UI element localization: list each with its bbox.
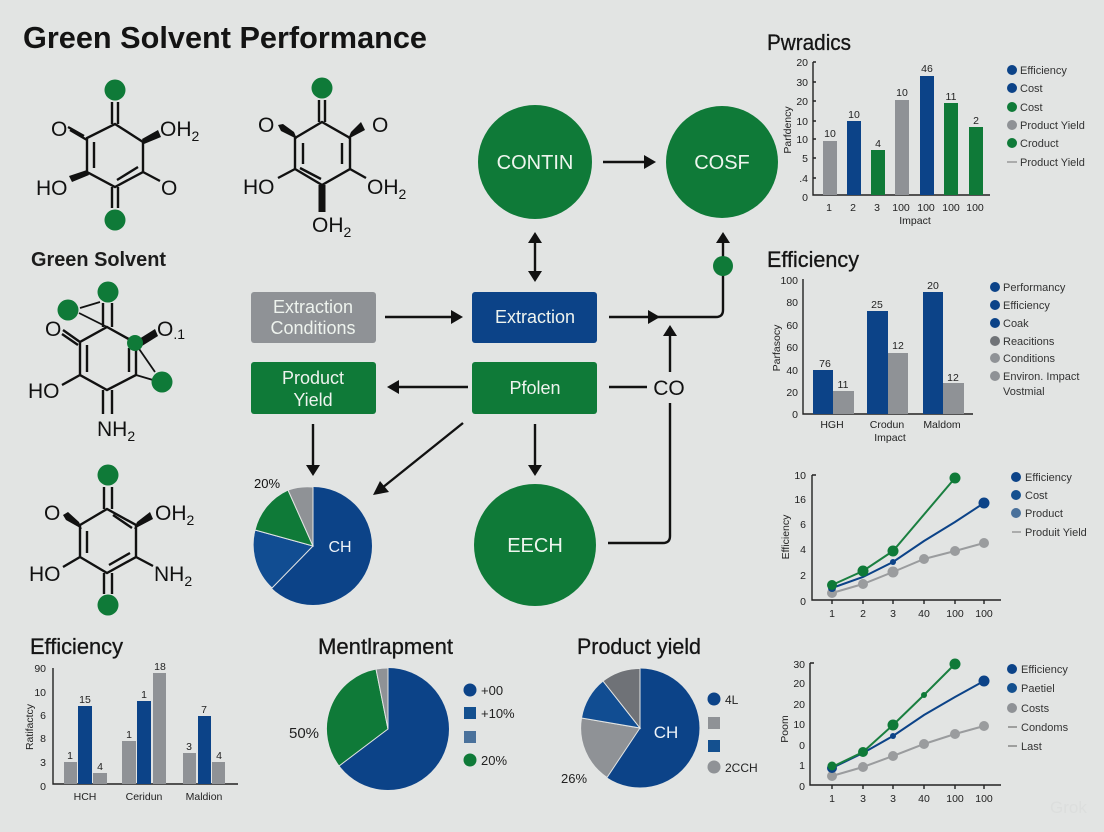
arrow: conditions to extraction	[385, 310, 463, 324]
bar chart: pwradics	[782, 57, 990, 227]
line chart: efficiency: 2	[860, 608, 866, 620]
arrow: extraction to cosf	[609, 232, 733, 324]
bar chart: efficiency bottom: 1	[141, 689, 147, 701]
line chart: poom	[779, 658, 1001, 805]
legend: product yield: 2CCH	[725, 761, 758, 775]
bar chart: efficiency right: 80	[786, 297, 798, 309]
legend: line chart efficiency: Product	[1025, 508, 1063, 520]
arrow: CO up to flow	[663, 325, 677, 372]
bar chart: efficiency bottom: 4	[216, 750, 222, 762]
legend: mentlrapment: 20%	[481, 753, 507, 768]
bar chart: efficiency right: 25	[871, 299, 883, 311]
bar chart: pwradics: 10	[848, 109, 860, 121]
bar chart: pwradics: 1	[826, 202, 832, 214]
molecule 3	[28, 282, 185, 444]
bar chart: efficiency bottom: 15	[79, 694, 91, 706]
molecule 4: 2	[184, 573, 192, 589]
bar chart: efficiency right: 0	[792, 409, 798, 421]
molecule 3: HO	[28, 380, 60, 403]
bar chart: efficiency right: 60	[786, 320, 798, 332]
bar chart: pwradics: 0	[802, 192, 808, 204]
pie chart: mentlrapment: 50%	[289, 725, 319, 742]
legend: product yield	[708, 692, 758, 775]
bar chart: pwradics: .4	[799, 173, 808, 185]
bar chart: efficiency right	[771, 275, 973, 444]
heading: green solvent: Green Solvent	[31, 249, 166, 271]
bar chart: pwradics: 100	[892, 202, 910, 214]
bar chart: pwradics: 20	[796, 57, 808, 69]
bar chart: efficiency right: 76	[819, 358, 831, 370]
bar chart: efficiency bottom: 10	[34, 687, 46, 699]
arrow: contin to cosf	[603, 155, 656, 169]
bar chart: pwradics: 10	[796, 116, 808, 128]
line chart: efficiency: 1	[829, 608, 835, 620]
bar chart: pwradics: 10	[896, 87, 908, 99]
bar chart: efficiency bottom: Ceridun	[126, 791, 163, 803]
bar chart: pwradics: 100	[917, 202, 935, 214]
bar chart: pwradics: 46	[921, 63, 933, 75]
bar chart: efficiency right: 20	[927, 280, 939, 292]
line chart: efficiency: 2	[800, 570, 806, 582]
legend: poom: Condoms	[1021, 722, 1069, 734]
node: CONTIN: CONTIN	[497, 152, 573, 174]
line chart: efficiency: 0	[800, 596, 806, 608]
bar chart: pwradics: 2	[850, 202, 856, 214]
box: product yield	[251, 362, 376, 414]
bar chart: pwradics: 2	[973, 115, 979, 127]
arrow: eech to CO	[608, 403, 670, 543]
molecule 4: O	[44, 502, 60, 525]
molecule 2	[243, 78, 406, 240]
legend: line chart efficiency: Efficiency	[1025, 472, 1072, 484]
molecule 4	[29, 464, 194, 616]
legend: pwradics: Cost	[1020, 83, 1043, 95]
molecule 3: 2	[127, 428, 135, 444]
bar chart: efficiency right: 11	[838, 379, 849, 391]
bar chart: efficiency right: 60	[786, 342, 798, 354]
molecule 1: O	[161, 177, 177, 200]
bar chart: pwradics: 20	[796, 96, 808, 108]
line chart: poom: 30	[793, 659, 805, 671]
box: extraction conditions: Conditions	[270, 318, 356, 338]
legend: efficiency right: Reacitions	[1003, 336, 1055, 348]
box: extraction conditions	[251, 292, 376, 343]
box: extraction	[472, 292, 597, 343]
bar chart: efficiency bottom	[24, 661, 238, 803]
molecule 2: 2	[344, 224, 352, 240]
legend: pwradics: Cost	[1020, 102, 1043, 114]
arrow: pfolen to product yield	[387, 380, 468, 394]
bar chart: efficiency bottom: Maldion	[186, 791, 223, 803]
molecule 2: OH	[367, 176, 398, 199]
molecule 3: .1	[173, 326, 185, 342]
legend: pwradics: Product Yield	[1020, 157, 1085, 169]
bar chart: efficiency bottom: HCH	[74, 791, 96, 803]
legend: line chart efficiency	[1011, 472, 1087, 539]
bar chart: pwradics: 11	[946, 91, 957, 103]
bar chart: efficiency right: 12	[947, 372, 959, 384]
molecule 2: 2	[398, 186, 406, 202]
legend: efficiency right: Coak	[1003, 318, 1029, 330]
legend: poom: Last	[1021, 741, 1042, 753]
line chart: poom: 0	[799, 781, 805, 793]
box: extraction conditions: Extraction	[273, 297, 353, 317]
line chart: poom: 100	[975, 793, 993, 805]
line chart: poom: 0	[799, 740, 805, 752]
molecule 4: 2	[186, 512, 194, 528]
legend: efficiency right: Conditions	[1003, 353, 1055, 365]
box: product yield: Product	[282, 368, 344, 388]
pie chart: product yield: 26%	[561, 771, 587, 786]
bar chart: pwradics: Impact	[899, 215, 931, 227]
line chart: efficiency: 3	[890, 608, 896, 620]
legend: efficiency right: Environ. Impact	[1003, 371, 1079, 383]
bar chart: pwradics: Parfdency	[782, 106, 794, 154]
pie chart: product yield	[561, 668, 700, 788]
bar chart: efficiency right: 12	[892, 340, 904, 352]
heading: pwradics: Pwradics	[767, 30, 851, 55]
bar chart: efficiency right: Crodun	[870, 419, 904, 431]
heading: efficiency bottom: Efficiency	[30, 634, 123, 659]
bar chart: efficiency bottom: 3	[40, 757, 46, 769]
legend: pwradics: Product Yield	[1020, 120, 1085, 132]
pie chart: center: 20%	[254, 476, 280, 491]
node: COSF: COSF	[694, 152, 750, 174]
arrow: pfolen to CO	[609, 377, 685, 400]
molecule 3: O	[45, 318, 61, 341]
bar chart: pwradics: 3	[874, 202, 880, 214]
bar chart: efficiency bottom: 6	[40, 710, 46, 722]
bar chart: efficiency bottom: 8	[40, 733, 46, 745]
bar chart: efficiency bottom: 0	[40, 781, 46, 793]
bar chart: efficiency right: HGH	[820, 419, 844, 431]
legend: efficiency right: Efficiency	[1003, 300, 1050, 312]
box: pfolen	[472, 362, 597, 414]
title: Green Solvent Performance	[23, 20, 427, 55]
bar chart: pwradics: 30	[796, 77, 808, 89]
bar chart: efficiency bottom: 3	[186, 741, 192, 753]
bar chart: efficiency bottom: 90	[34, 663, 46, 675]
line chart: efficiency: 100	[946, 608, 964, 620]
bar chart: pwradics: 10	[824, 128, 836, 140]
pie chart: product yield: CH	[654, 723, 678, 742]
line chart: efficiency: 4	[800, 544, 806, 556]
bar chart: efficiency bottom: 18	[154, 661, 166, 673]
arrow: pfolen to pie	[373, 423, 463, 495]
legend: pwradics: Croduct	[1020, 138, 1059, 150]
node: EECH: EECH	[507, 535, 563, 557]
legend: poom: Paetiel	[1021, 683, 1055, 695]
line chart: poom: 100	[946, 793, 964, 805]
bar chart: efficiency bottom: 1	[126, 729, 132, 741]
molecule 3: O	[157, 318, 173, 341]
legend: mentlrapment: +10%	[481, 706, 515, 721]
molecule 1: O	[51, 118, 67, 141]
line chart: poom: 3	[860, 793, 866, 805]
line chart: poom: 3	[890, 793, 896, 805]
arrow: product yield down	[306, 424, 320, 476]
box: pfolen: Pfolen	[509, 378, 561, 398]
box: extraction: Extraction	[495, 307, 575, 327]
molecule 2: O	[372, 114, 388, 137]
legend: mentlrapment: +00	[481, 683, 503, 698]
legend: line chart efficiency: Cost	[1025, 490, 1048, 502]
bar chart: pwradics: 4	[875, 138, 881, 150]
legend: poom: Efficiency	[1021, 664, 1068, 676]
bar chart: efficiency bottom: 4	[97, 761, 103, 773]
bar chart: pwradics: 10	[796, 134, 808, 146]
bar chart: efficiency right: Maldom	[923, 419, 961, 431]
heading: product yield: Product yield	[577, 634, 701, 659]
box: product yield: Yield	[293, 390, 333, 410]
molecule 3: NH	[97, 418, 127, 441]
pie chart: center	[253, 476, 372, 605]
molecule 1: OH	[160, 118, 192, 141]
legend: efficiency right	[990, 282, 1079, 398]
bar chart: pwradics: 100	[942, 202, 960, 214]
pie chart: mentlrapment	[289, 668, 449, 790]
molecule 4: HO	[29, 563, 60, 586]
bar chart: efficiency right: Parfasocy	[771, 324, 783, 371]
molecule 1	[36, 80, 200, 230]
bar chart: efficiency bottom: 7	[201, 704, 207, 716]
line chart: poom: 10	[793, 719, 805, 731]
legend: line chart efficiency: Produit Yield	[1025, 527, 1087, 539]
legend: poom	[1007, 664, 1069, 753]
bar chart: efficiency bottom: 1	[67, 750, 73, 762]
molecule 4: OH	[155, 502, 186, 525]
bar chart: pwradics: 5	[802, 153, 808, 165]
line chart: efficiency: 16	[794, 494, 806, 506]
bar chart: pwradics: 100	[966, 202, 984, 214]
molecule 1: HO	[36, 177, 68, 200]
legend: pwradics	[1007, 65, 1085, 169]
line chart: efficiency: 100	[975, 608, 993, 620]
legend: product yield: 4L	[725, 693, 739, 707]
molecule 2: O	[258, 114, 274, 137]
bar chart: efficiency right: 100	[780, 275, 798, 287]
legend: pwradics: Efficiency	[1020, 65, 1067, 77]
arrow: pfolen to CO: CO	[653, 377, 685, 400]
molecule 4: NH	[154, 563, 184, 586]
legend: efficiency right: Performancy	[1003, 282, 1066, 294]
line chart: efficiency	[780, 470, 1001, 620]
bar chart: efficiency bottom: Ratifactcy	[24, 703, 36, 750]
watermark: Grok	[1050, 798, 1087, 817]
line chart: efficiency: 10	[794, 470, 806, 482]
pie chart: center: CH	[328, 539, 352, 556]
line chart: poom: 20	[793, 699, 805, 711]
line chart: poom: 40	[918, 793, 930, 805]
line chart: poom: 1	[829, 793, 835, 805]
molecule 1: 2	[192, 128, 200, 144]
line chart: poom: Poom	[779, 715, 791, 743]
arrow: pfolen down	[528, 424, 542, 476]
legend: mentlrapment	[464, 683, 515, 768]
heading: mentlrapment: Mentlrapment	[318, 634, 453, 659]
bar chart: efficiency right: 20	[786, 387, 798, 399]
node: COSF	[666, 106, 778, 218]
line chart: efficiency: 40	[918, 608, 930, 620]
line chart: poom: 20	[793, 678, 805, 690]
line chart: efficiency: 6	[800, 519, 806, 531]
bar chart: efficiency right: Impact	[874, 432, 906, 444]
bar chart: efficiency right: 40	[786, 365, 798, 377]
line chart: poom: 1	[799, 760, 805, 772]
legend: poom: Costs	[1021, 703, 1050, 715]
heading: efficiency right: Efficiency	[767, 247, 859, 272]
node: EECH	[474, 484, 596, 606]
line chart: efficiency: Efficiency	[780, 514, 792, 559]
legend: efficiency right: Vostmial	[1003, 386, 1045, 398]
molecule 2: HO	[243, 176, 274, 199]
node: CONTIN	[478, 105, 592, 219]
molecule 2: OH	[312, 214, 344, 237]
arrow: contin to extraction double	[528, 232, 542, 282]
